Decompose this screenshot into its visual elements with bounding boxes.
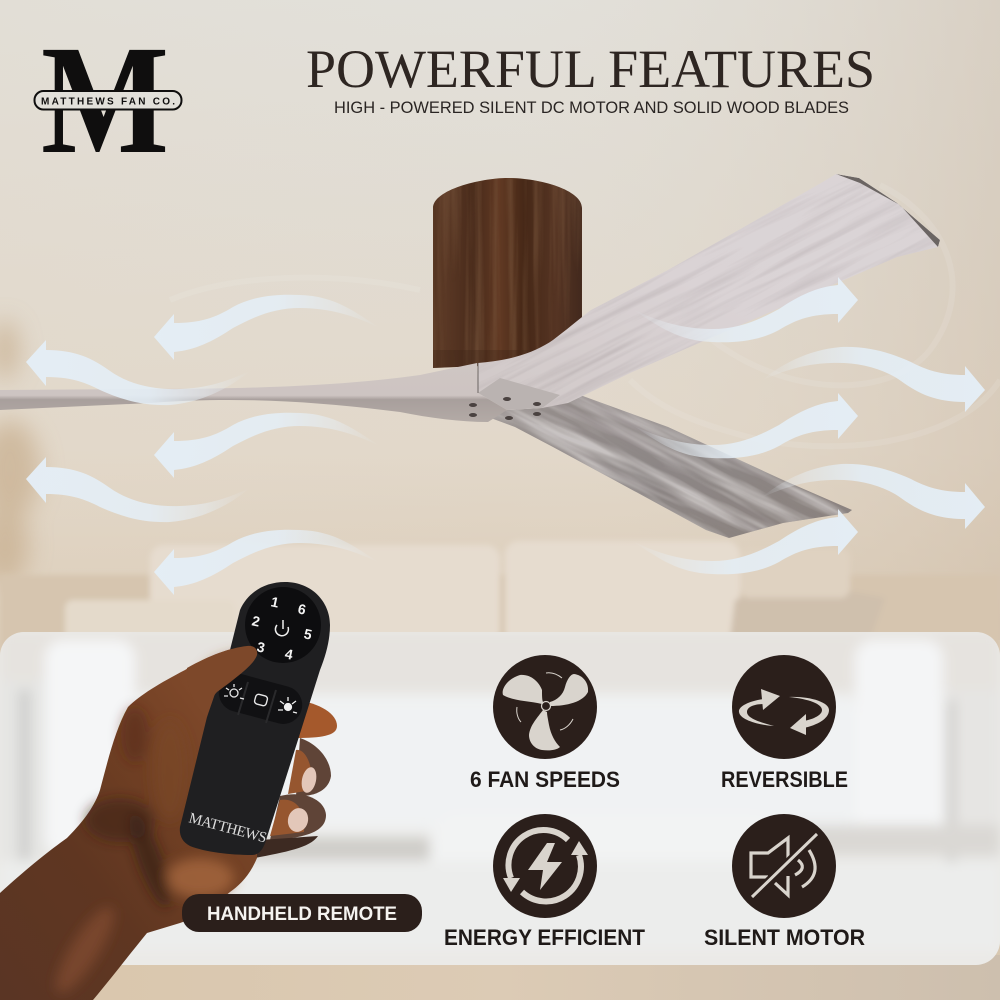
upper right fan blade xyxy=(478,174,940,410)
icon: reverse xyxy=(254,694,268,706)
speed numbers: 6 xyxy=(297,600,308,618)
speed numbers: 4 xyxy=(284,645,295,663)
wind arrows: right side xyxy=(632,277,985,574)
wind arrows: left side xyxy=(26,295,380,595)
frosted panel xyxy=(0,632,1000,965)
remote body xyxy=(180,582,330,855)
little finger shadow xyxy=(255,836,318,858)
speed numbers: 3 xyxy=(256,638,267,656)
middle finger xyxy=(296,738,331,796)
remote brand text: MATTHEWS xyxy=(187,810,268,847)
label: SILENT MOTOR xyxy=(704,925,865,950)
floor strip xyxy=(0,955,1000,1000)
background: blurred sofa xyxy=(0,541,1000,650)
label: REVERSIBLE xyxy=(721,767,848,792)
icon: rotation arrows xyxy=(732,655,836,759)
feature: energy efficient xyxy=(444,814,646,950)
icon: fan xyxy=(493,655,597,759)
logo: Matthews Fan Co.: M xyxy=(41,13,169,186)
feature: silent motor xyxy=(704,814,865,950)
speed numbers xyxy=(251,593,314,663)
background: blurred plant xyxy=(0,320,40,585)
speed numbers: 1 xyxy=(270,593,281,611)
icon: light bright xyxy=(278,697,297,713)
left fan blade xyxy=(0,363,507,422)
subtitle: HIGH - POWERED SILENT DC MOTOR AND SOLID WOOD BLADES xyxy=(334,98,849,117)
feature: reversible xyxy=(721,655,848,792)
label: 6 FAN SPEEDS xyxy=(470,767,620,792)
icon: light dim xyxy=(224,684,244,699)
ring fingernail xyxy=(285,806,311,834)
blade joint and bolts xyxy=(469,363,541,420)
label: ENERGY EFFICIENT xyxy=(444,925,646,950)
lower fan blade xyxy=(493,396,852,538)
icon: muted speaker xyxy=(732,814,836,918)
remote control xyxy=(180,582,330,855)
icon: energy cycle xyxy=(493,814,597,918)
thumb over remote xyxy=(187,646,257,717)
logo: Matthews Fan Co.: MATTHEWS FAN CO. xyxy=(41,96,175,108)
feature: 6 fan speeds xyxy=(470,655,620,792)
lower buttons xyxy=(215,670,306,728)
hand: fingers behind remote xyxy=(255,700,337,858)
fan motor mount xyxy=(433,178,582,368)
label pill: handheld remote xyxy=(182,894,422,932)
middle fingernail xyxy=(299,766,319,794)
swirl lines around fan blades xyxy=(170,185,1000,446)
fan xyxy=(0,16,1000,703)
speed dial xyxy=(245,587,321,663)
title: POWERFUL FEATURES xyxy=(306,39,875,99)
icon: power button xyxy=(275,620,288,636)
hand: palm and forearm xyxy=(0,646,260,1000)
label pill: handheld remote: HANDHELD REMOTE xyxy=(207,904,397,925)
ring finger xyxy=(270,794,326,840)
speed numbers: 5 xyxy=(303,625,314,643)
index finger xyxy=(296,700,337,738)
speed numbers: 2 xyxy=(251,612,262,630)
